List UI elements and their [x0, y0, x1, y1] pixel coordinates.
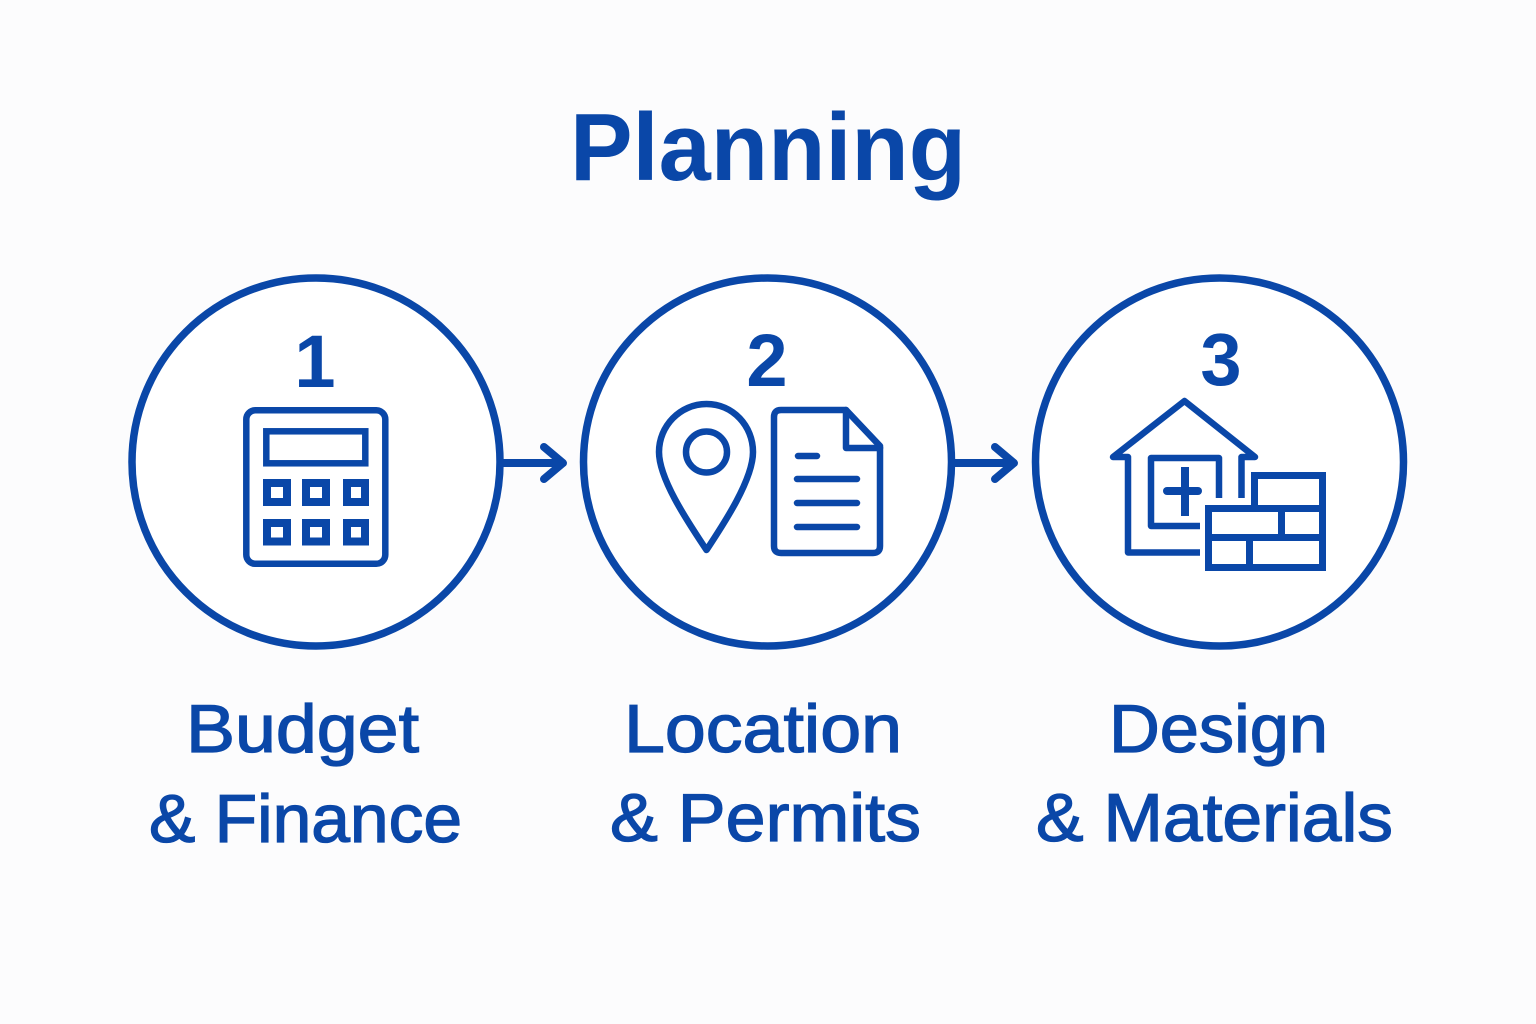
- step 1 label: & Finance: [149, 781, 462, 857]
- step 2 circle: [584, 278, 952, 646]
- step 1 label: Budget: [186, 691, 419, 767]
- arrow: step 2 to step 3: [954, 447, 1014, 479]
- step 2: location and permits: [584, 278, 952, 856]
- step 2 label: & Permits: [610, 780, 921, 856]
- step 3 circle: [1036, 278, 1404, 646]
- icon: document: [774, 410, 880, 553]
- step 1 circle: [132, 278, 500, 646]
- step 3 label: & Materials: [1036, 780, 1393, 856]
- step 3: design and materials: [1036, 278, 1404, 856]
- arrow: step 1 to step 2: [502, 447, 563, 479]
- step 3 number: 3: [1200, 318, 1242, 401]
- icon: house: [1113, 401, 1255, 552]
- step 1: budget and finance: [132, 278, 500, 857]
- title: Planning: [570, 94, 966, 201]
- icon: brick stack: [1208, 476, 1322, 568]
- icon: map pin: [659, 404, 753, 550]
- step 2 number: 2: [746, 319, 788, 402]
- icon: calculator: [246, 410, 385, 564]
- step 1 number: 1: [294, 320, 336, 403]
- step 2 label: Location: [624, 691, 902, 767]
- step 3 label: Design: [1109, 691, 1328, 767]
